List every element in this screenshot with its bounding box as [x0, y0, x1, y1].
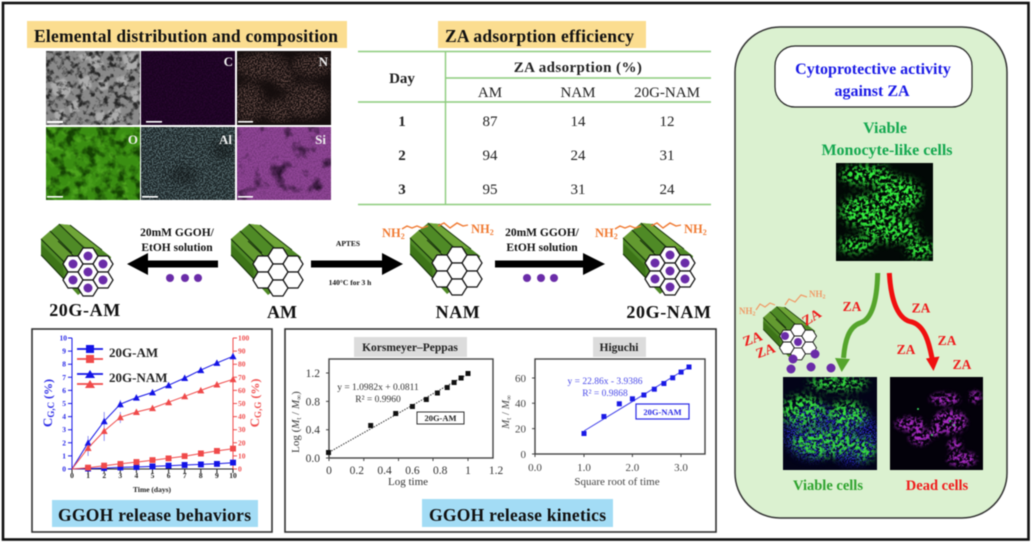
- chart: Korsmeyer-Peppas: M: [290, 399, 302, 410]
- labels: ZA: ZA: [912, 300, 931, 316]
- chart: cumulative release: 6: [167, 471, 171, 480]
- molecule: 20G-AM: 20G-AM: [49, 300, 121, 320]
- labels: ZA: ZA: [843, 299, 862, 314]
- chart: Korsmeyer-Peppas: 0.4: [377, 465, 392, 477]
- arrow: NAM to 20G-NAM: EtOH solution: [506, 242, 578, 254]
- chart: cumulative release: 0: [70, 471, 74, 480]
- label: dead cells: Dead cells: [906, 478, 969, 494]
- chart: Higuchi: 1.0: [577, 462, 591, 474]
- chart: Korsmeyer-Peppas: [290, 337, 503, 488]
- chart: cumulative release: 10: [229, 471, 237, 480]
- chart: Korsmeyer-Peppas: 0.0: [306, 453, 320, 465]
- chart: Korsmeyer-Peppas: ∞: [295, 395, 303, 400]
- callout: cytoprotective title: Cytoprotective activity: [795, 61, 951, 78]
- micrograph: viable cells: [782, 376, 878, 471]
- chart: Higuchi: M: [500, 419, 512, 430]
- molecule: drug-loaded carrier: 2: [822, 294, 826, 300]
- chart: cumulative release: 60: [238, 386, 246, 395]
- chart: cumulative release: 50: [238, 399, 246, 408]
- chart: Korsmeyer-Peppas: 0.8: [306, 396, 320, 408]
- arrow: AM to 20G-AM: EtOH solution: [141, 242, 213, 254]
- SEM image: [45, 50, 141, 126]
- molecule: NAM: [382, 222, 494, 322]
- chart: cumulative release: 2: [62, 438, 66, 447]
- chart: Korsmeyer-Peppas: 0.6: [405, 465, 420, 477]
- heading: elemental distribution: Elemental distribution and composition: [34, 26, 338, 46]
- O map: [45, 126, 141, 201]
- Si map: [236, 126, 332, 201]
- chart: cumulative release: 10: [60, 334, 67, 342]
- chart: cumulative release: 9: [215, 471, 219, 480]
- molecule: 20G-AM: [41, 224, 121, 320]
- chart: cumulative release: 10: [238, 451, 246, 460]
- chart: cumulative release: 80: [238, 360, 246, 369]
- micrograph: dead cells: [889, 376, 984, 471]
- chart: Korsmeyer-Peppas: 1.2: [489, 465, 503, 477]
- chart: cumulative release: (%): [41, 379, 55, 402]
- N map: N: [319, 54, 329, 69]
- chart: Korsmeyer-Peppas: 1: [465, 465, 471, 477]
- chart: cumulative release: 8: [199, 471, 203, 480]
- chart: Korsmeyer-Peppas: t: [295, 418, 303, 420]
- chart: Higuchi: 0.0: [528, 462, 542, 474]
- chart: Higuchi: 3.0: [674, 462, 688, 474]
- heading: viable monocyte-like cells: [821, 120, 953, 159]
- chart: cumulative release: 7: [183, 471, 187, 480]
- table: ZA adsorption: [358, 51, 711, 204]
- chart: cumulative release: 70: [238, 373, 246, 382]
- label: GGOH release kinetics: [422, 499, 613, 527]
- chart: cumulative release: 5: [151, 471, 155, 480]
- chart: Korsmeyer-Peppas: y = 1.0982x + 0.0811: [337, 383, 419, 393]
- chart: cumulative release: 1: [86, 471, 90, 480]
- panel: GGOH release behaviors: [32, 329, 272, 532]
- O map: O: [128, 132, 138, 147]
- chart: cumulative release: C: [40, 418, 55, 427]
- table: ZA adsorption: 94: [482, 148, 498, 164]
- molecule: 20G-NAM: 20G-NAM: [626, 302, 712, 322]
- chart: Korsmeyer-Peppas: Korsmeyer–Peppas: [362, 342, 458, 354]
- arrow: AM to NAM: APTES: [336, 239, 360, 248]
- chart legend: 20G-NAM: [109, 370, 168, 385]
- arrow: green to viable cells: [835, 273, 878, 372]
- chart: cumulative release: 40: [238, 412, 246, 421]
- chart: cumulative release: 100: [238, 334, 250, 342]
- chart: Higuchi: Square root of time: [574, 476, 660, 488]
- table: ZA adsorption: 12: [660, 114, 674, 130]
- heading: ZA adsorption efficiency: [438, 21, 646, 48]
- Al map: [140, 126, 236, 201]
- table: ZA adsorption: 24: [570, 148, 586, 164]
- chart: cumulative release: (%): [248, 379, 262, 402]
- chart: Korsmeyer-Peppas: Log time: [388, 476, 428, 488]
- chart: Higuchi: 20G-NAM: [643, 407, 682, 417]
- callout: cytoprotective title: against ZA: [834, 83, 910, 100]
- chart: Korsmeyer-Peppas: ): [290, 391, 302, 395]
- table: ZA adsorption: 3: [398, 182, 406, 198]
- chart: Korsmeyer-Peppas: 0.4: [306, 425, 320, 437]
- table: ZA adsorption: 31: [570, 182, 586, 198]
- labels: ZA: [843, 299, 972, 372]
- chart: cumulative release: 6: [62, 386, 66, 395]
- table: ZA adsorption: 87: [482, 114, 498, 130]
- chart: Higuchi: [500, 337, 705, 488]
- Si map: Si: [315, 132, 326, 147]
- chart: cumulative release: 2: [102, 471, 106, 480]
- chart: Higuchi: R² = 0.9868: [582, 389, 628, 399]
- callout: cytoprotective title: [775, 46, 972, 107]
- chart: Higuchi: /: [500, 409, 512, 418]
- chart: cumulative release: 4: [62, 412, 66, 421]
- chart: cumulative release: 20: [238, 438, 246, 447]
- molecule: drug-loaded carrier: [739, 289, 836, 374]
- chart: cumulative release: 1: [62, 451, 66, 460]
- molecule: drug-loaded carrier: 2: [752, 312, 756, 318]
- chart: cumulative release: 8: [62, 360, 66, 369]
- chart: cumulative release: 30: [238, 425, 246, 434]
- chart: Higuchi: y = 22.86x - 3.9386: [567, 377, 643, 387]
- chart legend: [77, 345, 168, 388]
- table: ZA adsorption: 95: [482, 182, 498, 198]
- chart: Higuchi: 40: [515, 398, 526, 410]
- table: ZA adsorption: Day: [389, 71, 415, 87]
- chart: cumulative release: Time (days): [133, 485, 171, 494]
- chart: cumulative release: C: [247, 418, 262, 427]
- arrow: NAM to 20G-NAM: 20mM GGOH/: [505, 227, 580, 239]
- chart: Higuchi: ∞: [505, 395, 513, 400]
- table: ZA adsorption: 14: [570, 114, 586, 130]
- chart: Korsmeyer-Peppas: 0.2: [350, 465, 364, 477]
- table: ZA adsorption: ZA adsorption (%): [514, 60, 642, 76]
- molecule: drug-loaded carrier: ZA: [800, 306, 825, 330]
- molecule: drug-loaded carrier: NH: [809, 289, 822, 299]
- arrow: red to dead cells: [889, 273, 940, 371]
- chart: Korsmeyer-Peppas: 0: [326, 465, 332, 477]
- chart: Higuchi: 0: [520, 449, 526, 461]
- table: ZA adsorption: NAM: [560, 85, 596, 101]
- Al map: Al: [219, 132, 232, 147]
- molecule: drug-loaded carrier: ZA: [754, 341, 778, 362]
- chart: cumulative release: G,C: [46, 402, 56, 418]
- C map: [140, 50, 236, 126]
- panel: elemental maps: [46, 51, 332, 200]
- arrow: NAM to 20G-NAM: [495, 227, 605, 282]
- molecule: 20G-NAM: [595, 222, 712, 322]
- label: GGOH release behaviors: [52, 500, 258, 527]
- chart: Higuchi: 2.0: [626, 462, 640, 474]
- chart: cumulative release: 3: [62, 425, 66, 434]
- micrograph: monocyte-like cells: [835, 162, 934, 262]
- chart: cumulative release: [40, 334, 263, 494]
- arrow: AM to 20G-AM: [127, 227, 218, 282]
- C map: C: [224, 54, 233, 69]
- table: ZA adsorption: 31: [660, 148, 674, 164]
- heading: viable monocyte-like cells: Viable: [863, 120, 907, 137]
- chart: Higuchi: M: [500, 399, 512, 410]
- chart: Higuchi: 60: [515, 373, 526, 385]
- panel: GGOH release kinetics: [285, 329, 716, 532]
- arrow: AM to NAM: 140°C for 3 h: [329, 278, 372, 287]
- heading: viable monocyte-like cells: Monocyte-like cells: [821, 142, 953, 159]
- chart: Higuchi: Higuchi: [600, 342, 639, 354]
- molecule: drug-loaded carrier: NH: [739, 306, 752, 316]
- chart: cumulative release: 0: [238, 464, 242, 474]
- chart: cumulative release: 4: [135, 471, 139, 480]
- chart: cumulative release: 3: [118, 471, 122, 480]
- table: ZA adsorption: 1: [398, 114, 406, 130]
- N map: [236, 50, 332, 126]
- table: ZA adsorption: 20G-NAM: [634, 85, 700, 101]
- chart: Korsmeyer-Peppas: R² = 0.9960: [355, 395, 401, 405]
- chart: cumulative release: 90: [238, 347, 246, 356]
- chart: Korsmeyer-Peppas: 20G-AM: [424, 413, 457, 423]
- table: ZA adsorption: AM: [478, 85, 502, 101]
- chart: cumulative release: 5: [62, 399, 66, 408]
- molecule: AM: AM: [267, 302, 297, 322]
- chart: Korsmeyer-Peppas: /: [290, 409, 302, 418]
- table: ZA adsorption: 24: [660, 182, 675, 198]
- table: ZA adsorption: 2: [398, 148, 406, 164]
- chart: cumulative release: G,G: [253, 402, 263, 418]
- label: GGOH release kinetics: GGOH release kinetics: [429, 505, 606, 525]
- chart: cumulative release: 0: [62, 464, 66, 474]
- label: GGOH release behaviors: GGOH release behaviors: [58, 505, 251, 525]
- chart: Korsmeyer-Peppas: Log (M: [290, 420, 302, 453]
- heading: ZA adsorption efficiency: ZA adsorption efficiency: [445, 26, 634, 46]
- molecule: NAM: NAM: [436, 302, 480, 322]
- chart legend: 20G-AM: [109, 345, 158, 360]
- chart: Korsmeyer-Peppas: 0.8: [433, 465, 448, 477]
- chart: cumulative release: 7: [62, 373, 66, 382]
- labels: ZA: ZA: [953, 357, 972, 372]
- chart: Higuchi: 20: [515, 424, 526, 436]
- chart: cumulative release: 9: [62, 347, 66, 356]
- labels: ZA: ZA: [938, 333, 957, 348]
- arrow: AM to 20G-AM: 20mM GGOH/: [140, 227, 215, 239]
- panel: cytoprotective activity: [735, 27, 1007, 518]
- chart: Korsmeyer-Peppas: 1.2: [306, 368, 320, 380]
- molecule: drug-loaded carrier: ZA: [741, 329, 765, 350]
- label: viable cells: Viable cells: [793, 478, 863, 494]
- arrow: AM to NAM: [311, 239, 403, 287]
- chart: Higuchi: t: [505, 418, 513, 420]
- molecule: AM: [231, 224, 303, 322]
- labels: ZA: ZA: [897, 342, 916, 357]
